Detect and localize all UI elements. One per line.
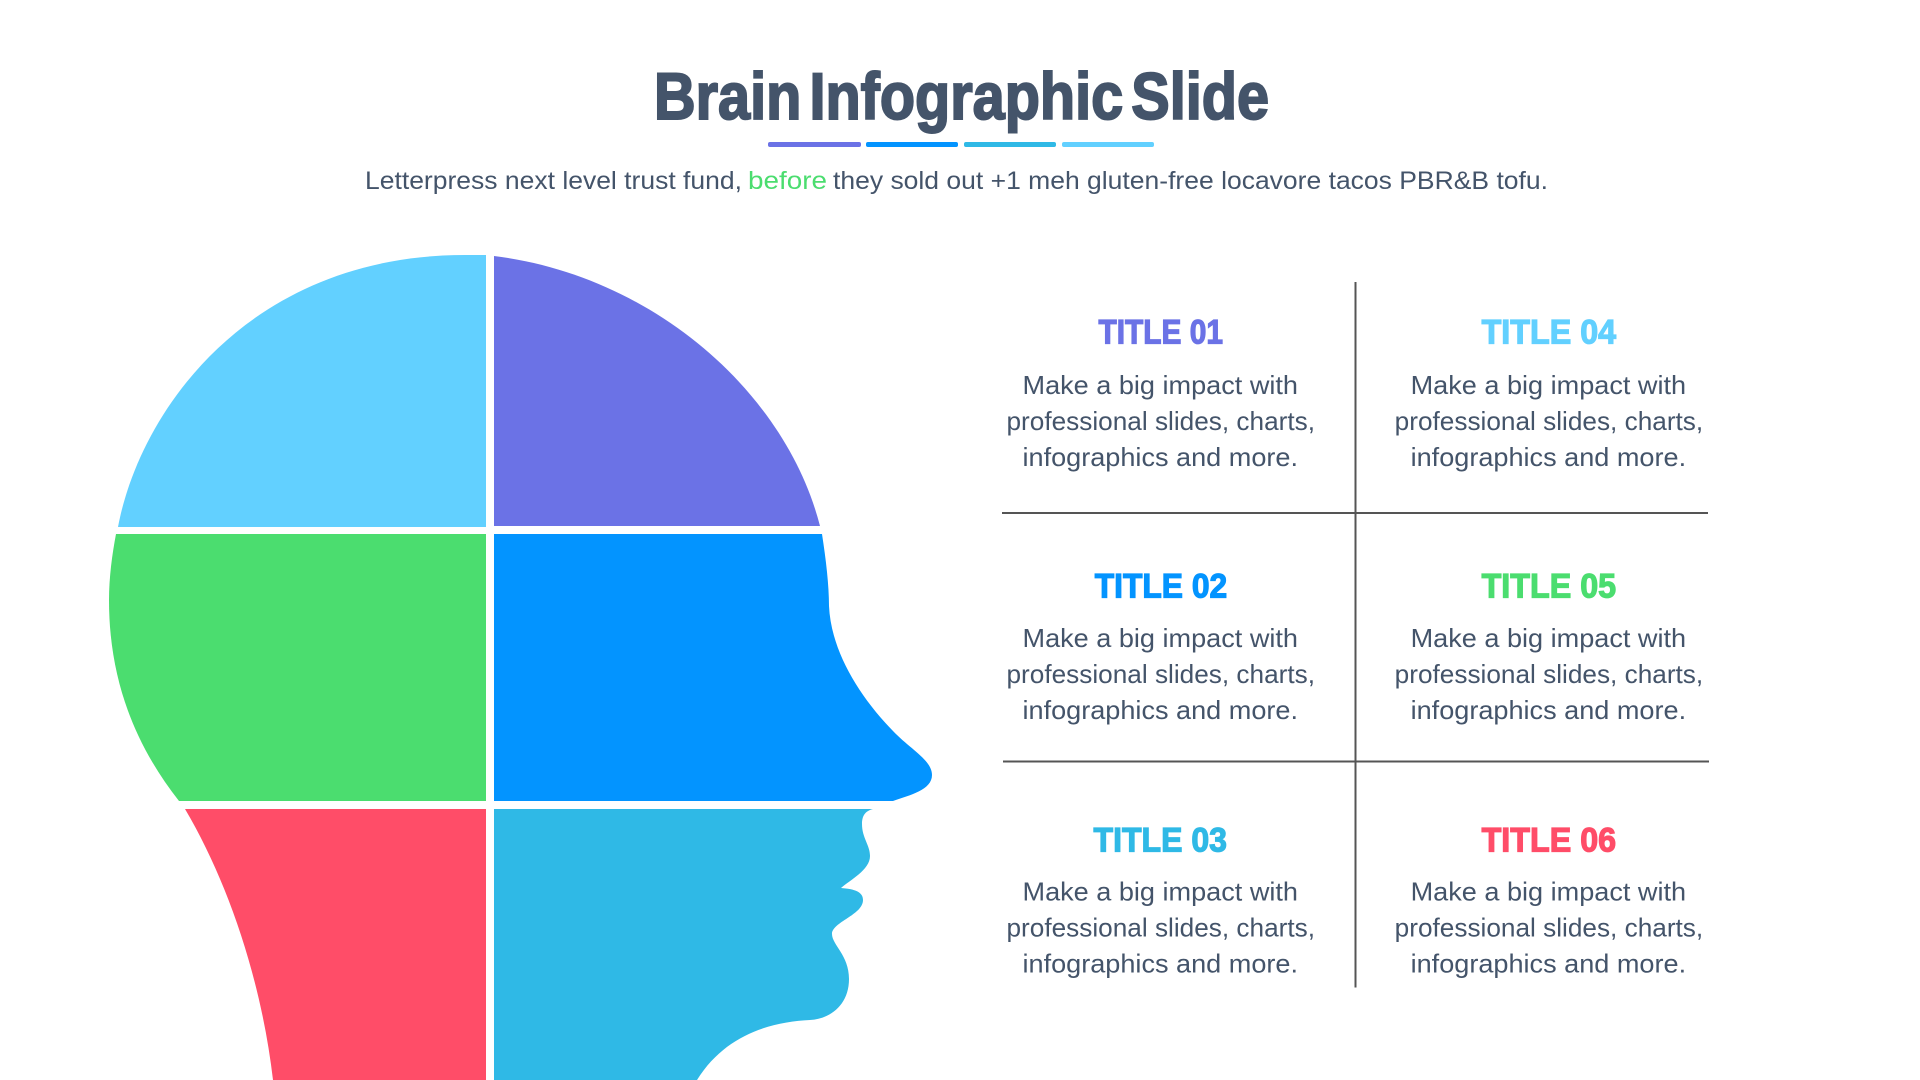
body text: card 06: infographics and more. [1411,949,1686,979]
body text: card 01: Make a big impact with [1022,370,1298,400]
body text: card 03: infographics and more. [1022,949,1298,979]
heading: title 05: TITLE 05 [1482,568,1616,606]
body text: card 01: professional slides, charts, [1006,406,1315,436]
title underline bars [768,142,1154,147]
body text: card 06 [1395,877,1703,979]
card: title 01 [1006,314,1315,472]
head segment: lower back neck (red) [185,809,486,1080]
body text: card 04: infographics and more. [1411,442,1686,472]
grid lines [1002,282,1709,988]
body text: card 02 [1006,623,1315,725]
head profile diagram [109,255,932,1080]
body text: card 03 [1006,877,1315,979]
body text: card 04: professional slides, charts, [1395,406,1703,436]
body text: card 06: professional slides, charts, [1395,913,1703,943]
head segment: upper front (purple) [494,256,820,526]
body text: card 06: Make a big impact with [1411,877,1686,907]
heading: title 03: TITLE 03 [1094,822,1227,860]
body text: card 03: professional slides, charts, [1006,913,1315,943]
body text: card 02: Make a big impact with [1022,623,1298,653]
body text: card 04: Make a big impact with [1411,370,1686,400]
subtitle: Letterpress next level trust fund, [365,167,742,195]
body text: card 05: infographics and more. [1411,695,1686,725]
card: title 06 [1395,822,1703,979]
body text: card 05: Make a big impact with [1411,623,1686,653]
title: Brain Infographic Slide [654,59,1269,133]
heading: title 06: TITLE 06 [1482,822,1616,860]
head segment: lower front with mouth and chin (teal) [494,809,873,1080]
heading: title 02: TITLE 02 [1095,568,1227,606]
head segment: middle back (green) [109,534,486,801]
body text: card 02: infographics and more. [1022,695,1298,725]
head segment: upper back (light blue) [118,255,486,527]
body text: card 05: professional slides, charts, [1395,659,1703,689]
body text: card 01 [1006,370,1315,472]
subtitle: they sold out +1 meh gluten-free locavore tacos PBR&B tofu. [833,167,1548,195]
card: title 04 [1395,314,1703,472]
body text: card 03: Make a big impact with [1022,877,1298,907]
heading: title 04: TITLE 04 [1482,314,1616,352]
subtitle: before [748,167,827,195]
body text: card 02: professional slides, charts, [1006,659,1315,689]
subtitle [365,167,1548,195]
card: title 03 [1006,822,1315,979]
head segment: middle front with nose (blue) [494,534,932,801]
body text: card 05 [1395,623,1703,725]
body text: card 04 [1395,370,1703,472]
body text: card 01: infographics and more. [1022,442,1298,472]
card: title 02 [1006,568,1315,725]
heading: title 01: TITLE 01 [1098,314,1223,352]
card: title 05 [1395,568,1703,725]
